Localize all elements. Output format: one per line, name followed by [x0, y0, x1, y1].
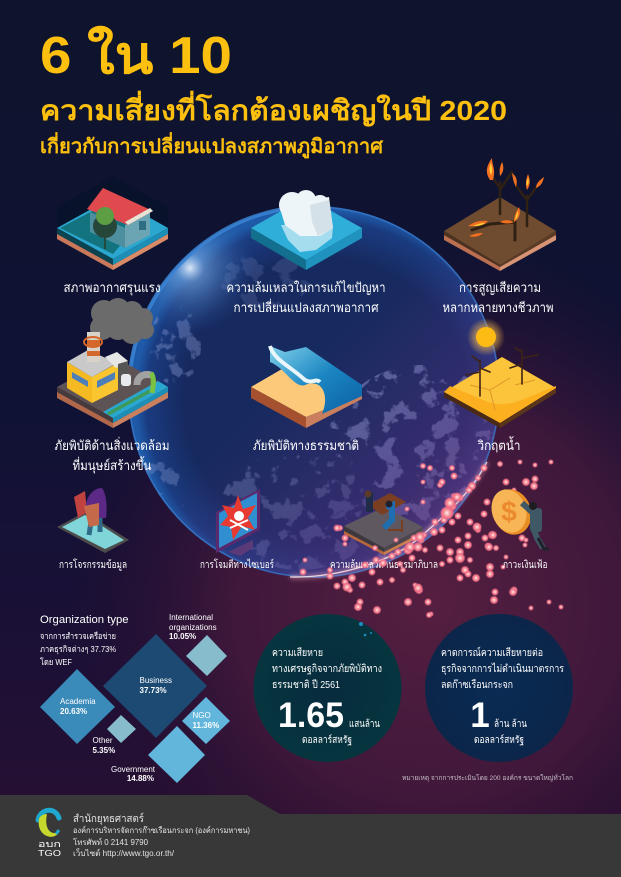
panel: organization type — [40, 613, 230, 783]
label: biodiversity loss: หลากหลายทางชีวภาพ — [442, 300, 554, 315]
label: governance failure: ความล้มเหลวด้านธรรมาภิบาล — [330, 559, 438, 571]
icon: burning trees — [444, 158, 556, 271]
label: climate action failure — [226, 280, 386, 315]
diamond chart: NGO — [192, 711, 211, 720]
diamond chart: organizations — [169, 623, 217, 632]
panel: no climate action cost: ดอลลาร์สหรัฐ — [474, 734, 524, 746]
label: climate action failure: ความล้มเหลวในการแก้ไขปัญหา — [226, 280, 386, 295]
text block: organization contact: องค์การบริหารจัดการก๊าซเรือนกระจก (องค์การมหาชน) — [73, 825, 250, 835]
diamond chart: International — [169, 613, 213, 622]
icon: gold coin and businessman: $ — [501, 496, 517, 527]
text block: organization contact: สำนักยุทธศาสตร์ — [73, 812, 144, 825]
diamond chart: Business — [140, 676, 172, 685]
panel: no climate action cost: ลดก๊าซเรือนกระจก — [441, 678, 513, 691]
icon: gold coin and businessman — [486, 484, 549, 549]
label: cyber attacks: การโจมตีทางไซเบอร์ — [200, 558, 274, 571]
panel: no climate action cost: ล้าน ล้าน — [494, 718, 527, 730]
label: man-made environmental disasters: ที่มนุษย์สร้างขึ้น — [72, 456, 152, 474]
text block: survey note: ภาคธุรกิจต่างๆ 37.73% — [40, 644, 116, 655]
panel: natural disaster damage: ธรรมชาติ ปี 2561 — [272, 678, 340, 691]
text block: organization contact — [73, 812, 250, 858]
label: climate action failure: การเปลี่ยนแปลงสภาพอากาศ — [234, 299, 379, 315]
icon: TGO logo — [38, 810, 61, 858]
diamond chart: 37.73% — [140, 686, 167, 695]
text block: survey note: จากการสำรวจเครือข่าย — [40, 631, 116, 641]
label: extreme weather: สภาพอากาศรุนแรง — [64, 280, 160, 296]
label: biodiversity loss: การสูญเสียความ — [459, 280, 541, 296]
footnote: หมายเหตุ จากการประเมินโดย 200 องค์กร ขนาดใหญ่ทั่วโลก — [402, 773, 573, 782]
text block: survey note — [40, 631, 116, 667]
text block: organization contact: โทรศัพท์ 0 2141 9790 — [73, 837, 149, 847]
label: fiscal crisis: ภาวะเงินเฟ้อ — [502, 559, 548, 571]
diamond chart: 11.36% — [192, 721, 219, 730]
icon: cyber attack monitor — [216, 489, 260, 556]
icon: drought land — [444, 348, 556, 428]
diamond chart: 20.63% — [60, 707, 87, 716]
label: natural disasters: ภัยพิบัติทางธรรมชาติ — [253, 438, 359, 453]
subheading: เกี่ยวกับการเปลี่ยนแปลงสภาพภูมิอากาศ — [40, 131, 384, 160]
diamond chart: 10.05% — [169, 632, 196, 641]
heading: ความเสี่ยงที่โลกต้องเผชิญในปี 2020 — [40, 90, 507, 127]
text block: organization contact: เว็บไซต์ http://www.tgo.or.th/ — [73, 848, 175, 858]
icon: TGO logo: อบก — [38, 839, 61, 849]
icon: iceberg — [251, 190, 362, 270]
diamond chart: 14.88% — [127, 774, 154, 783]
panel: natural disaster damage: ทางเศรษฐกิจจากภัยพิบัติทาง — [272, 663, 382, 675]
globe — [128, 205, 498, 578]
heading: organization type: Organization type — [40, 614, 129, 626]
panel: natural disaster damage — [254, 614, 402, 762]
icon: TGO logo: TGO — [38, 848, 61, 858]
title: 6 in 10: 6 ใน 10 — [40, 25, 232, 85]
label: water crisis: วิกฤตน้ำ — [477, 436, 520, 453]
icon: sun — [467, 318, 505, 356]
panel: natural disaster damage: ดอลลาร์สหรัฐ — [302, 734, 352, 746]
text block: survey note: โดย WEF — [40, 657, 72, 667]
title — [40, 25, 507, 160]
sparkles — [290, 460, 563, 618]
panel: no climate action cost — [425, 614, 573, 762]
diamond chart: 5.35% — [92, 746, 115, 755]
label: man-made environmental disasters — [54, 437, 170, 474]
panel: natural disaster damage: แสนล้าน — [349, 718, 380, 730]
panel: no climate action cost: ธุรกิจจากการไม่ดำเนินมาตรการ — [441, 662, 564, 675]
number: 1.65: 1.65 — [278, 696, 344, 735]
label: biodiversity loss — [442, 280, 554, 315]
diamond chart: Academia — [60, 697, 96, 706]
icon: data theft — [57, 488, 129, 553]
diamond chart — [40, 613, 230, 783]
icon: polluting factory — [57, 298, 168, 428]
label: data fraud: การโจรกรรมข้อมูล — [59, 558, 127, 571]
footer — [0, 795, 621, 877]
number: 1: 1 — [470, 696, 490, 735]
diamond chart: Government — [111, 765, 156, 774]
panel: no climate action cost: คาดการณ์ความเสียหายต่อ — [441, 646, 543, 659]
icon: governance meeting — [344, 490, 423, 555]
icon: tsunami wave — [251, 346, 362, 428]
panel: natural disaster damage: ความเสียหาย — [272, 646, 323, 659]
icon: house in flood — [57, 176, 168, 270]
label: man-made environmental disasters: ภัยพิบัติด้านสิ่งแวดล้อม — [54, 437, 170, 453]
diamond chart: Other — [92, 736, 113, 745]
